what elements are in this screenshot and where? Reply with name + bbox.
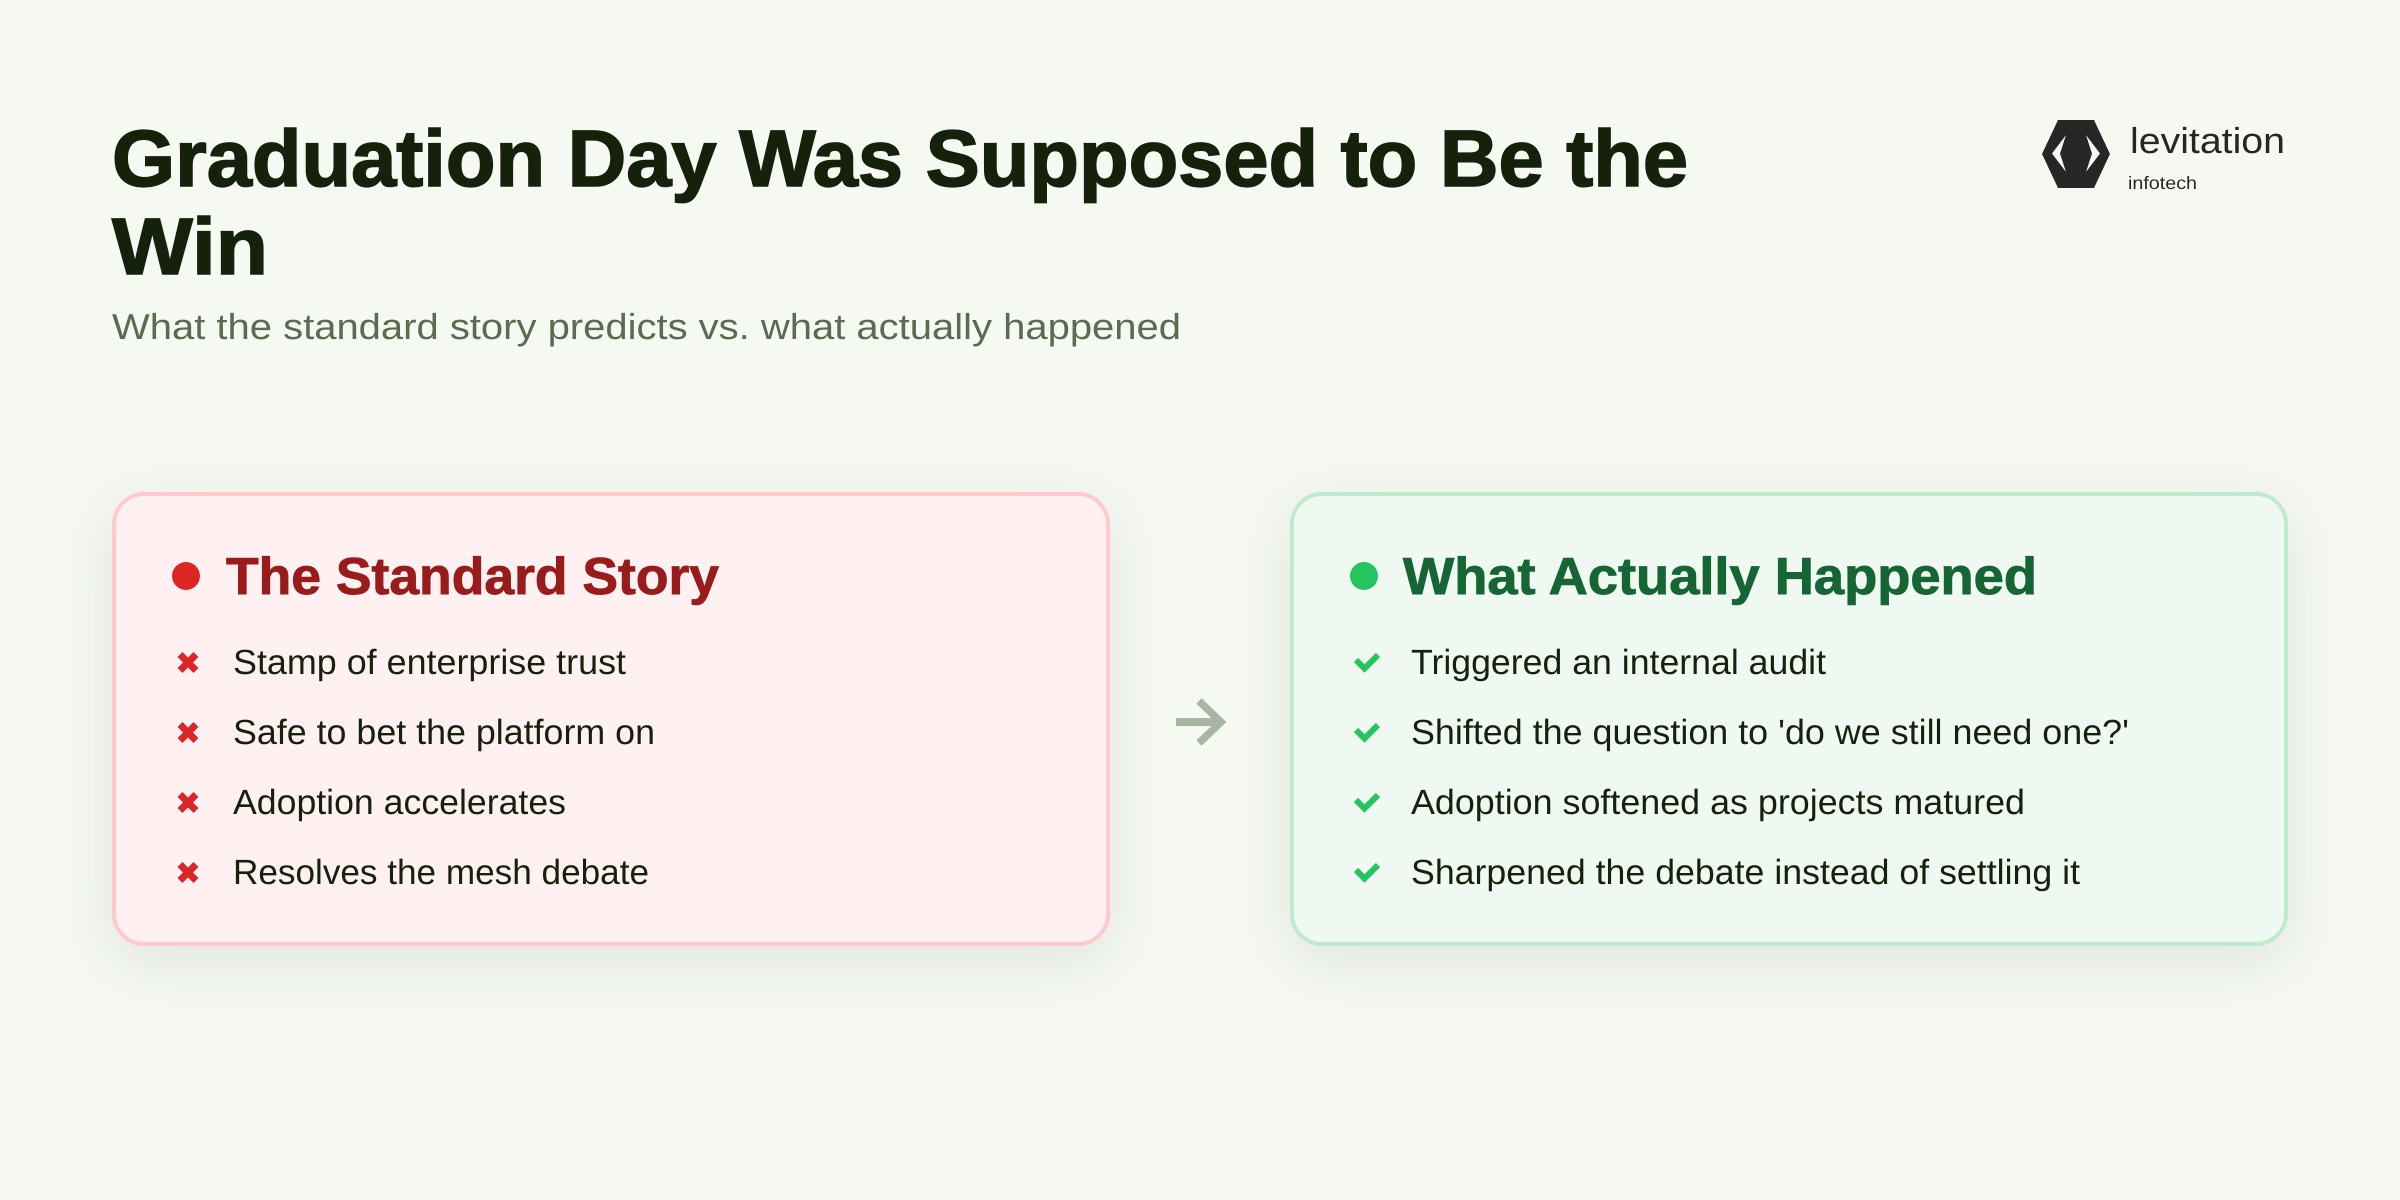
header: title and subtitle xyxy=(111,114,1688,347)
panel heading with green dot: What Actually Happened xyxy=(1403,548,2037,606)
list item: adoption accelerates: Adoption accelerates xyxy=(233,783,566,822)
panel: what actually happened xyxy=(1290,492,2288,946)
title xyxy=(112,114,1688,291)
list item: triggered an internal audit: Triggered an internal audit xyxy=(1411,643,1826,682)
arrow: standard story to what happened xyxy=(1176,698,1226,746)
list item: sharpened the debate: Sharpened the debate instead of settling it xyxy=(1411,853,2080,892)
list item: stamp of enterprise trust: Stamp of enterprise trust xyxy=(233,643,626,682)
panel heading with red dot: The Standard Story xyxy=(226,548,719,606)
subtitle: What the standard story predicts vs. what actually happened xyxy=(112,306,1181,347)
list item: shifted the question: Shifted the question to 'do we still need one?' xyxy=(1411,713,2129,752)
title: Graduation Day Was Supposed to Be the xyxy=(112,114,1688,203)
logo: levitation infotech xyxy=(2042,120,2285,193)
list item: adoption softened: Adoption softened as projects matured xyxy=(1411,783,2025,822)
panel: the standard story xyxy=(112,492,1110,946)
logo wordmark xyxy=(2128,120,2285,193)
logo wordmark: levitation xyxy=(2130,120,2285,161)
list item: resolves the mesh debate: Resolves the mesh debate xyxy=(233,853,649,892)
title: Win xyxy=(112,202,268,291)
icon: hexagon with chevrons xyxy=(2042,120,2110,188)
logo wordmark: infotech xyxy=(2128,173,2197,193)
list item: safe to bet the platform on: Safe to bet the platform on xyxy=(233,713,655,752)
